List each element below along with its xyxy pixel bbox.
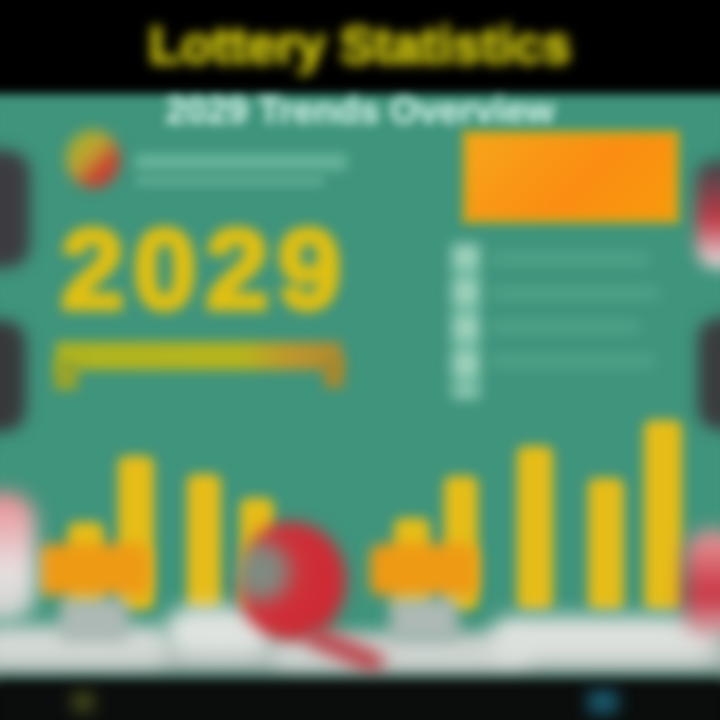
podium column left	[60, 598, 128, 642]
footer accent right	[588, 690, 618, 714]
dark footer band	[0, 678, 720, 720]
text block: header note	[132, 150, 350, 189]
header note line two	[135, 176, 325, 186]
bar 9	[644, 420, 682, 610]
podium lump middle	[165, 606, 275, 658]
white podium base	[0, 590, 720, 684]
bar 7	[517, 446, 553, 610]
bullet icons	[452, 244, 480, 398]
icon: right ball upper	[696, 160, 720, 268]
bar chart	[59, 410, 692, 619]
icon: right ball lower	[698, 318, 720, 430]
banner under year	[46, 334, 352, 398]
bar 4	[240, 498, 274, 610]
icon: central red ball	[236, 522, 346, 640]
footer accent left	[72, 692, 94, 712]
banner left tail	[54, 360, 78, 390]
chart label left	[38, 544, 150, 596]
list line two	[490, 286, 660, 300]
callout: orange box	[462, 130, 680, 224]
bar 8	[588, 478, 624, 610]
title: Lottery Statistics	[149, 17, 571, 75]
podium grey underlay	[0, 638, 720, 676]
icon: left red and white ball	[0, 492, 36, 622]
icon: right red and white ball	[684, 530, 720, 640]
podium lump centre	[270, 636, 530, 670]
list line four	[490, 354, 655, 368]
banner band	[56, 342, 342, 370]
big year number: 2029	[61, 207, 351, 332]
list line three	[490, 320, 640, 334]
bar 6	[444, 476, 478, 610]
icon: central ball ribbon	[304, 625, 386, 675]
subtitle: 2029 Trends Overview	[166, 90, 554, 131]
icon: left lottery ball upper	[0, 150, 30, 268]
bar 1	[68, 522, 104, 610]
header note line one	[135, 154, 347, 170]
podium lump right	[490, 616, 720, 662]
list: statistics bullet items	[444, 235, 654, 407]
icon: logo circle	[66, 130, 120, 188]
bar 3	[187, 474, 221, 610]
banner right tail	[324, 358, 344, 388]
chart label right	[370, 544, 478, 596]
bar 2	[118, 456, 154, 610]
list line one	[490, 252, 650, 266]
podium lump left	[0, 626, 170, 666]
icon: left lottery ball lower	[0, 320, 26, 432]
podium column centre	[390, 598, 458, 642]
bar 5	[394, 518, 430, 610]
